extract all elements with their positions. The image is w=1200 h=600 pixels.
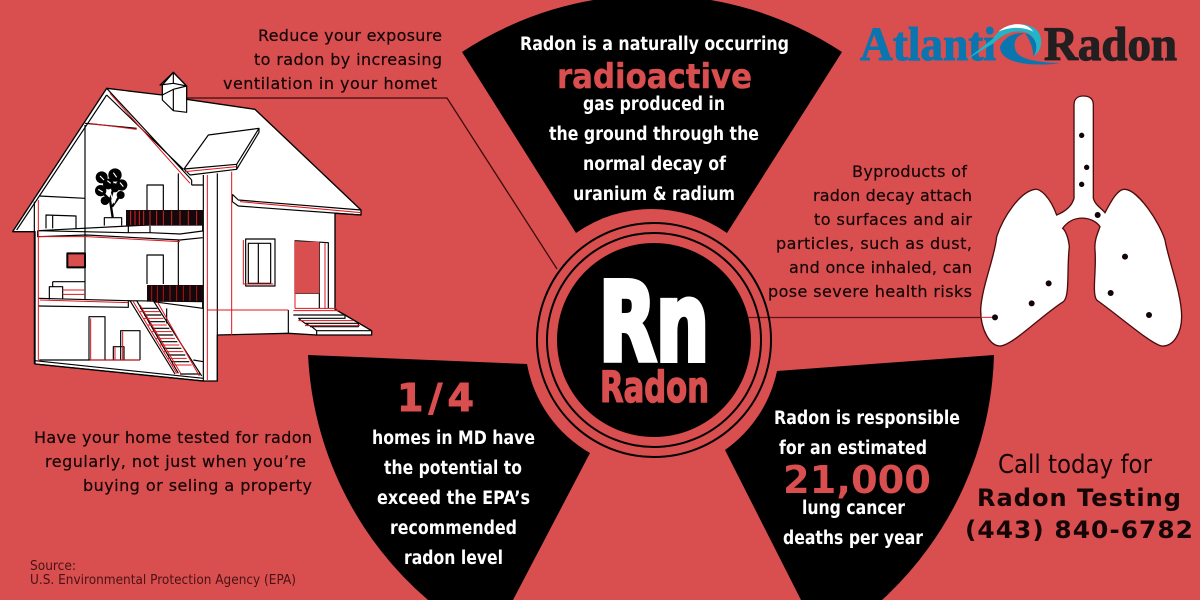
connector line: center to lungs (745, 316, 990, 318)
text block: testing advice: buying or seling a property (83, 476, 312, 495)
panel: bottom right radiation wedge: deaths per year (783, 528, 924, 549)
text block: byproducts of radon decay: to surfaces and air (814, 210, 972, 229)
source note: U.S. Environmental Protection Agency (EPA) (30, 573, 296, 588)
icon: lungs (981, 96, 1182, 346)
panel: bottom left radiation wedge: homes in MD have (372, 428, 535, 449)
panel: top radiation wedge: normal decay of (583, 154, 727, 175)
plant (95, 168, 127, 217)
call to action: Call today for (998, 450, 1152, 480)
text block: byproducts of radon decay: radon decay attach (813, 186, 972, 205)
call to action: Radon Testing (977, 484, 1182, 512)
panel: bottom right radiation wedge (725, 355, 994, 600)
text block: ventilation advice: to radon by increasing (254, 50, 442, 69)
panel: top radiation wedge: Radon is a naturally occurring (520, 34, 789, 55)
center element: radon symbol (537, 223, 771, 457)
name: Radon: Radon (600, 363, 709, 413)
panel: bottom left radiation wedge (308, 355, 590, 600)
text block: byproducts of radon decay: Byproducts of (852, 162, 967, 181)
panel: top radiation wedge (462, 0, 842, 233)
panel: bottom left radiation wedge: radon level (404, 548, 503, 569)
panel: top radiation wedge: the ground through the (549, 124, 759, 145)
text block: byproducts of radon decay: and once inhaled, can (789, 258, 972, 277)
balcony railing lower (147, 285, 203, 302)
panel: bottom left radiation wedge: the potential to (384, 458, 522, 479)
logo wave (965, 24, 1060, 64)
panel: bottom left radiation wedge: recommended (390, 518, 517, 539)
source note (30, 559, 296, 588)
balcony railing upper (126, 210, 203, 226)
panel: top radiation wedge: gas produced in (583, 94, 725, 115)
call to action (965, 450, 1194, 544)
statistic: 21,000: 21,000 (783, 458, 931, 502)
logo: Atlantic Radon: Radon (1044, 18, 1177, 71)
panel: bottom right radiation wedge: lung cancer (802, 498, 906, 519)
logo: Atlantic Radon (860, 18, 1177, 71)
source note: Source: (30, 559, 76, 574)
panel: top radiation wedge: uranium & radium (573, 184, 735, 205)
icon: house cutaway (13, 72, 372, 381)
right door opening (295, 242, 319, 293)
logo: Atlantic Radon: Atlanti (860, 18, 996, 71)
panel: bottom right radiation wedge: Radon is responsible (774, 408, 960, 429)
text block: byproducts of radon decay: particles, such as dust, (776, 234, 972, 253)
keyword: radioactive: radioactive (557, 57, 752, 97)
text block: testing advice (34, 428, 312, 495)
text block: ventilation advice: ventilation in your homet (223, 74, 437, 93)
symbol: Rn: Rn (599, 261, 709, 386)
statistic: 1/4: 1/4 (397, 376, 474, 420)
text block: testing advice: regularly, not just when you’re (45, 452, 306, 471)
panel: bottom left radiation wedge: exceed the EPA’s (377, 488, 530, 509)
text block: byproducts of radon decay: pose severe health risks (768, 282, 972, 301)
text block: byproducts of radon decay (768, 162, 972, 301)
panel: bottom right radiation wedge: for an estimated (779, 438, 927, 459)
text block: testing advice: Have your home tested for radon (34, 428, 312, 447)
connector line: house to center (187, 98, 557, 269)
call to action: (443) 840-6782 (965, 516, 1194, 544)
window frame on left wall (67, 253, 85, 267)
text block: ventilation advice: Reduce your exposure (258, 26, 442, 45)
text block: ventilation advice (223, 26, 442, 93)
